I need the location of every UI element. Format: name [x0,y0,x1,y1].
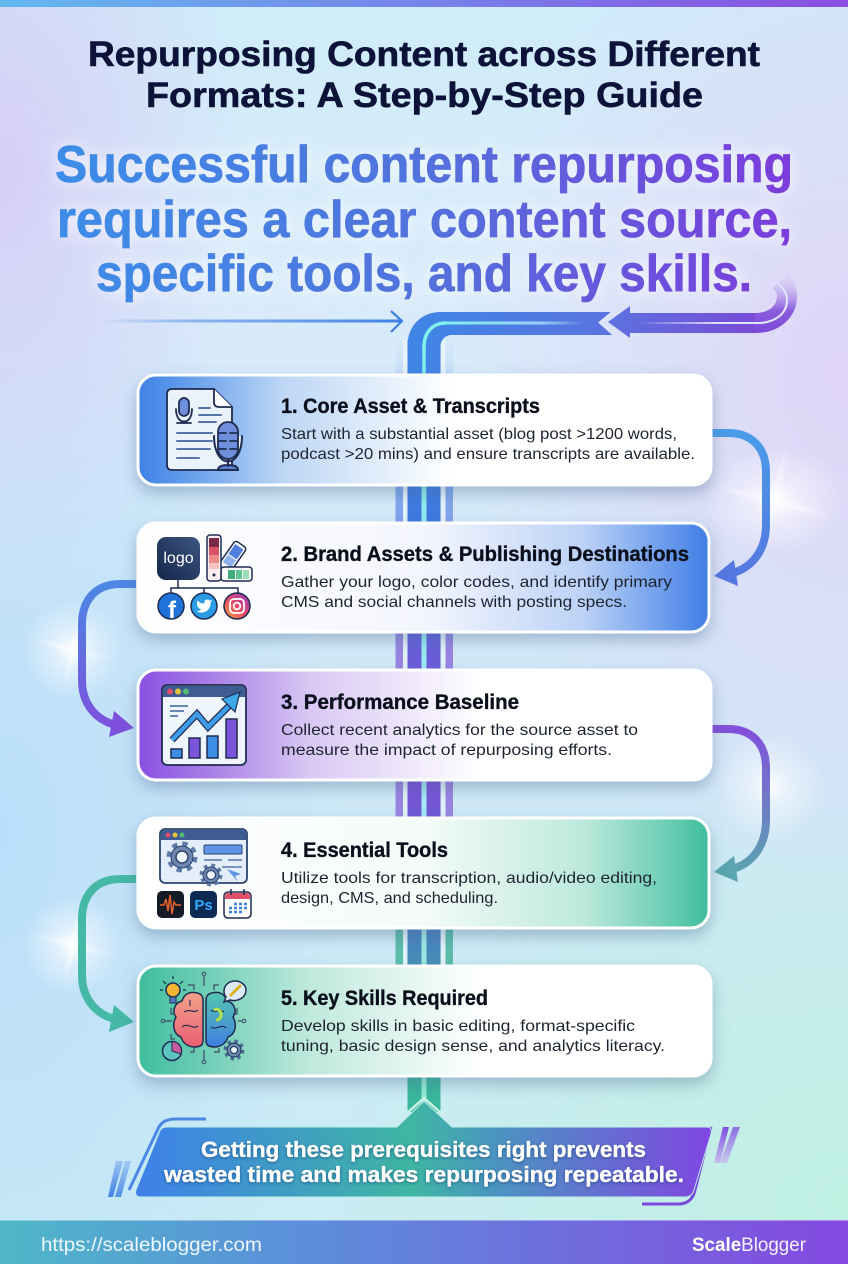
step 1 description: Start with a substantial asset (blog post >1200 words, [281,426,677,443]
icon: logo, swatches and social networks: logo [163,550,194,567]
step 3 description [281,722,638,759]
closing banner [108,1098,740,1204]
banner message: Getting these prerequisites right prevents [201,1137,646,1162]
headline: requires a clear content source, [57,191,792,249]
panel: step 3 performance baseline [138,670,711,780]
step 5 heading: 5. Key Skills Required [281,987,488,1010]
step 2 description: Gather your logo, color codes, and identify primary [281,574,672,591]
step 2 description [281,574,672,611]
icon: brain with skill symbols [160,972,246,1064]
panel: step 1 core asset [138,375,711,485]
headline: specific tools, and key skills. [96,245,752,303]
top pipe elbow and incoming arrow [408,281,787,375]
step 1 heading: 1. Core Asset & Transcripts [281,395,540,418]
step 5 description [281,1018,665,1055]
step 1 description [281,426,695,463]
banner message: wasted time and makes repurposing repeatable. [163,1162,684,1187]
thin arrow pointing to pipe [100,311,402,332]
headline [55,136,793,303]
central pipeline [396,340,453,1112]
step 2 heading: 2. Brand Assets & Publishing Destinations [281,543,689,566]
banner apex chevron [407,1098,441,1113]
step 5 description: Develop skills in basic editing, format-specific [281,1018,635,1035]
icon: document and microphone [167,389,242,470]
title: Formats: A Step-by-Step Guide [146,76,703,115]
step 4 heading: 4. Essential Tools [281,839,448,862]
connector arrow: step 1 to 2 [712,433,766,586]
title [88,35,760,115]
top gradient bar [0,0,848,7]
step 1 description: podcast >20 mins) and ensure transcripts are available. [281,446,695,463]
step 4 description: design, CMS, and scheduling. [281,890,498,907]
step 5 description: tuning, basic design sense, and analytics literacy. [281,1038,665,1055]
panel: step 2 brand assets [138,523,709,632]
banner body [136,1101,711,1197]
icon: logo, swatches and social networks: f [168,597,177,624]
headline: Successful content repurposing [55,136,793,194]
banner message [163,1137,684,1187]
footer url: https://scaleblogger.com [41,1235,262,1256]
panel: step 5 key skills [138,966,711,1076]
step 4 description [281,870,657,907]
right banner accents [642,1127,740,1204]
step 3 heading: 3. Performance Baseline [281,691,519,714]
light flares [23,429,846,995]
footer bar [0,1220,848,1264]
panel: step 4 essential tools [138,818,709,928]
icon: logo, swatches and social networks [157,535,252,624]
footer brand: ScaleBlogger [692,1235,807,1256]
title: Repurposing Content across Different [88,35,760,74]
icon: tools window, gears and apps [157,829,251,918]
step 3 description: measure the impact of repurposing efforts. [281,742,612,759]
left banner accents [108,1119,206,1197]
connector arrow: step 4 to 5 [82,879,136,1032]
step 4 description: Utilize tools for transcription, audio/video editing, [281,870,657,887]
step 2 description: CMS and social channels with posting specs. [281,594,627,611]
icon: analytics window with rising arrow [162,685,246,765]
icon: tools window, gears and apps: Ps [194,897,213,914]
connector arrow: step 2 to 3 [82,584,136,737]
step 3 description: Collect recent analytics for the source asset to [281,722,638,739]
connector arrow: step 3 to 4 [712,729,766,882]
